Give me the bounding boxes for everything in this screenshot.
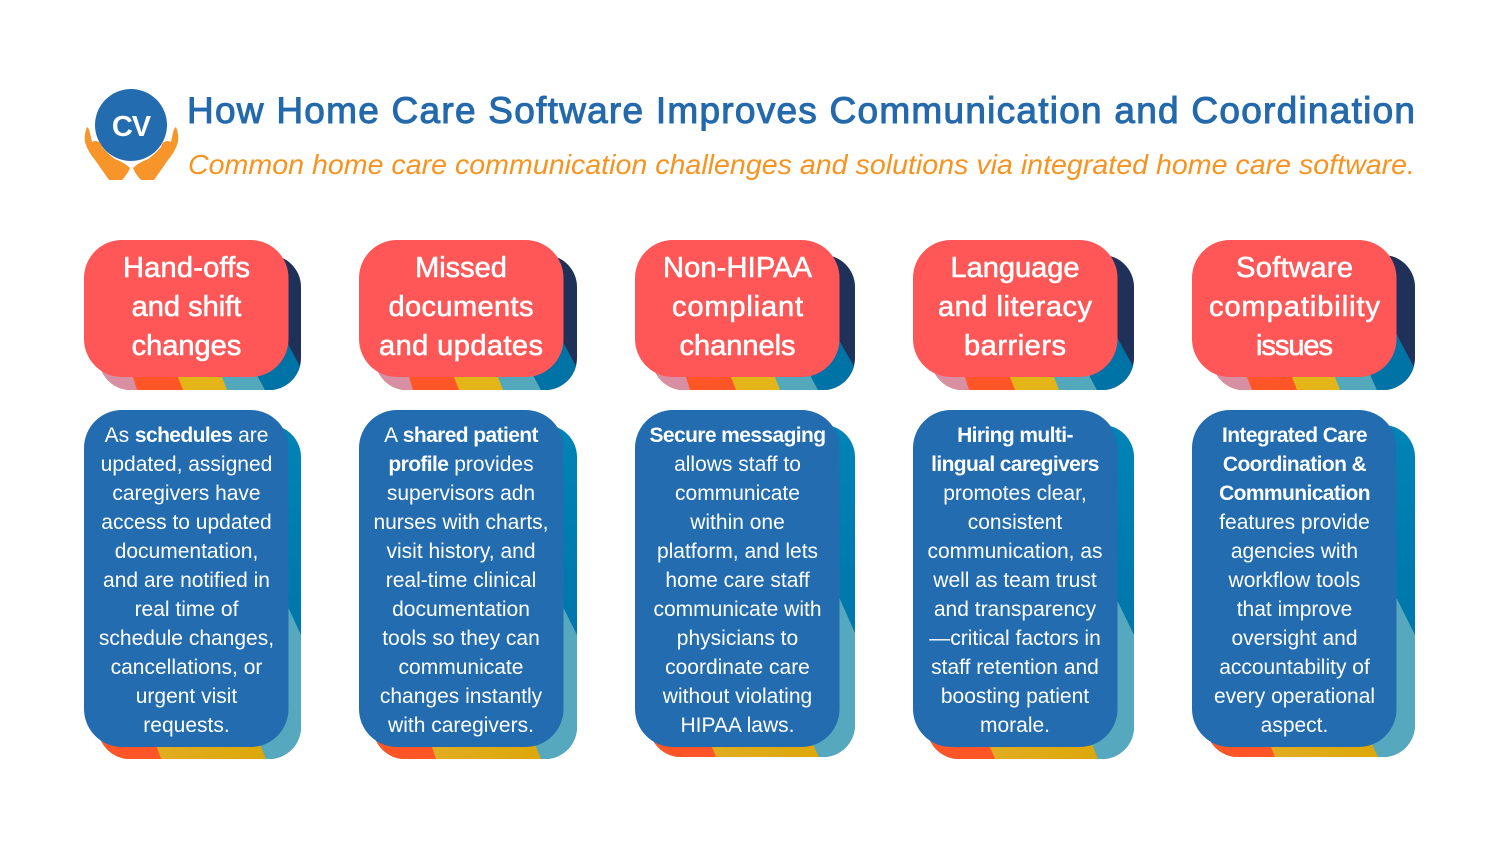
solution card: shared patient profile: A shared patient [384, 424, 539, 447]
solution card: secure messaging: home care staff [665, 569, 810, 592]
solution card: schedules: and are notified in [103, 569, 270, 592]
solution card: shared patient profile: nurses with charts, [373, 511, 549, 534]
challenge card: Software compatibility issues: issues [1256, 330, 1333, 362]
subtitle: Common home care communication challenges and solutions via integrated home care software. [188, 149, 1415, 180]
solution card: shared patient profile: real-time clinical [386, 569, 536, 592]
column 1: hand-offs and shift changes [84, 240, 301, 759]
column 3: non-HIPAA compliant channels [635, 240, 855, 757]
solution card: multi-lingual caregivers: communication, as [927, 540, 1103, 563]
challenge card: Hand-offs and shift changes: Hand-offs [123, 252, 250, 284]
solution card: integrated care coordination: features provide [1219, 511, 1370, 534]
solution card: schedules: schedule changes, [99, 627, 274, 650]
challenge card: Missed documents and updates: Missed [415, 252, 507, 284]
solution card: integrated care coordination: agencies with [1231, 540, 1358, 563]
icon: CV circle [95, 89, 167, 161]
solution card: secure messaging: without violating [662, 685, 812, 708]
title: How Home Care Software Improves Communication and Coordination [187, 90, 1415, 131]
solution card: schedules: documentation, [115, 540, 258, 563]
challenge card: Non-HIPAA compliant channels: compliant [672, 291, 803, 323]
solution card: multi-lingual caregivers: and transparency [934, 598, 1097, 621]
challenge card: Non-HIPAA compliant channels [635, 240, 855, 390]
solution card: schedules: cancellations, or [111, 656, 262, 679]
solution card: multi-lingual caregivers: —critical factors in [929, 627, 1101, 650]
solution card: multi-lingual caregivers: lingual caregivers [931, 453, 1099, 476]
challenge card: Language and literacy barriers [913, 240, 1134, 390]
solution card: shared patient profile [359, 410, 577, 759]
solution card: multi-lingual caregivers [913, 410, 1134, 759]
solution card: multi-lingual caregivers: Hiring multi- [957, 424, 1074, 447]
solution card: integrated care coordination: accountability of [1219, 656, 1370, 679]
icon: right hand [133, 127, 178, 180]
column 5: software compatibility issues [1192, 240, 1415, 757]
solution card: schedules [84, 410, 301, 759]
solution card: schedules: updated, assigned [101, 453, 272, 476]
challenge card: Software compatibility issues: Software [1236, 252, 1353, 284]
solution card: secure messaging [635, 410, 855, 757]
solution card: multi-lingual caregivers: consistent [968, 511, 1062, 534]
challenge card: Software compatibility issues: compatibility [1209, 291, 1380, 323]
solution card: shared patient profile: with caregivers. [387, 714, 534, 737]
solution card: schedules: caregivers have [112, 482, 261, 505]
challenge card: Non-HIPAA compliant channels: channels [679, 330, 796, 362]
solution card: secure messaging: within one [689, 511, 785, 534]
challenge card: Language and literacy barriers: barriers [964, 330, 1066, 362]
solution card: multi-lingual caregivers: morale. [980, 714, 1050, 737]
solution card: integrated care coordination: oversight and [1231, 627, 1358, 650]
challenge card: Non-HIPAA compliant channels: Non-HIPAA [663, 252, 813, 284]
challenge card: Hand-offs and shift changes [84, 240, 301, 390]
solution card: secure messaging: HIPAA laws. [681, 714, 794, 737]
challenge card: Hand-offs and shift changes: and shift [132, 291, 241, 323]
challenge card: Missed documents and updates [359, 240, 577, 390]
challenge card: Language and literacy barriers: Language [950, 252, 1080, 284]
solution card: integrated care coordination: Communication [1219, 482, 1370, 505]
solution card: integrated care coordination: that improve [1237, 598, 1352, 621]
solution card: integrated care coordination: Coordination & [1223, 453, 1367, 476]
solution card: secure messaging: allows staff to [674, 453, 801, 476]
challenge card: Software compatibility issues [1192, 240, 1415, 390]
solution card: shared patient profile: visit history, and [386, 540, 536, 563]
challenge card: Missed documents and updates: and updates [379, 330, 543, 362]
solution card: integrated care coordination: workflow tools [1228, 569, 1360, 592]
solution card: secure messaging: physicians to [677, 627, 798, 650]
solution card: schedules: access to updated [101, 511, 272, 534]
challenge card: Language and literacy barriers: and literacy [938, 291, 1092, 323]
solution card: secure messaging: platform, and lets [657, 540, 818, 563]
solution card: shared patient profile: documentation [392, 598, 530, 621]
solution card: schedules: real time of [135, 598, 239, 621]
logo initials: CV [112, 111, 152, 143]
solution card: integrated care coordination: aspect. [1261, 714, 1328, 737]
column 2: missed documents and updates [359, 240, 577, 759]
solution card: shared patient profile: communicate [399, 656, 523, 679]
solution card: schedules: As schedules are [105, 424, 268, 447]
solution card: secure messaging: Secure messaging [650, 424, 826, 447]
column 4: language and literacy barriers [913, 240, 1134, 759]
solution card: shared patient profile: changes instantly [380, 685, 543, 708]
challenge card: Missed documents and updates: documents [388, 291, 534, 323]
solution card: secure messaging: coordinate care [665, 656, 810, 679]
solution card: multi-lingual caregivers: boosting patient [941, 685, 1089, 708]
solution card: integrated care coordination [1192, 410, 1415, 757]
solution card: multi-lingual caregivers: staff retention and [931, 656, 1099, 679]
solution card: schedules: urgent visit [136, 685, 237, 708]
solution card: secure messaging: communicate [675, 482, 800, 505]
solution card: integrated care coordination: Integrated Care [1222, 424, 1367, 447]
solution card: multi-lingual caregivers: promotes clear, [943, 482, 1087, 505]
solution card: shared patient profile: profile provides [388, 453, 534, 476]
solution card: shared patient profile: tools so they can [382, 627, 540, 650]
logo: CV circle with caring hands [85, 89, 178, 180]
solution card: schedules: requests. [143, 714, 230, 737]
solution card: secure messaging: communicate with [653, 598, 822, 621]
icon: left hand [85, 127, 130, 180]
solution card: shared patient profile: supervisors adn [387, 482, 535, 505]
solution card: multi-lingual caregivers: well as team trust [932, 569, 1097, 592]
solution card: integrated care coordination: every operational [1214, 685, 1375, 708]
challenge card: Hand-offs and shift changes: changes [132, 330, 241, 362]
